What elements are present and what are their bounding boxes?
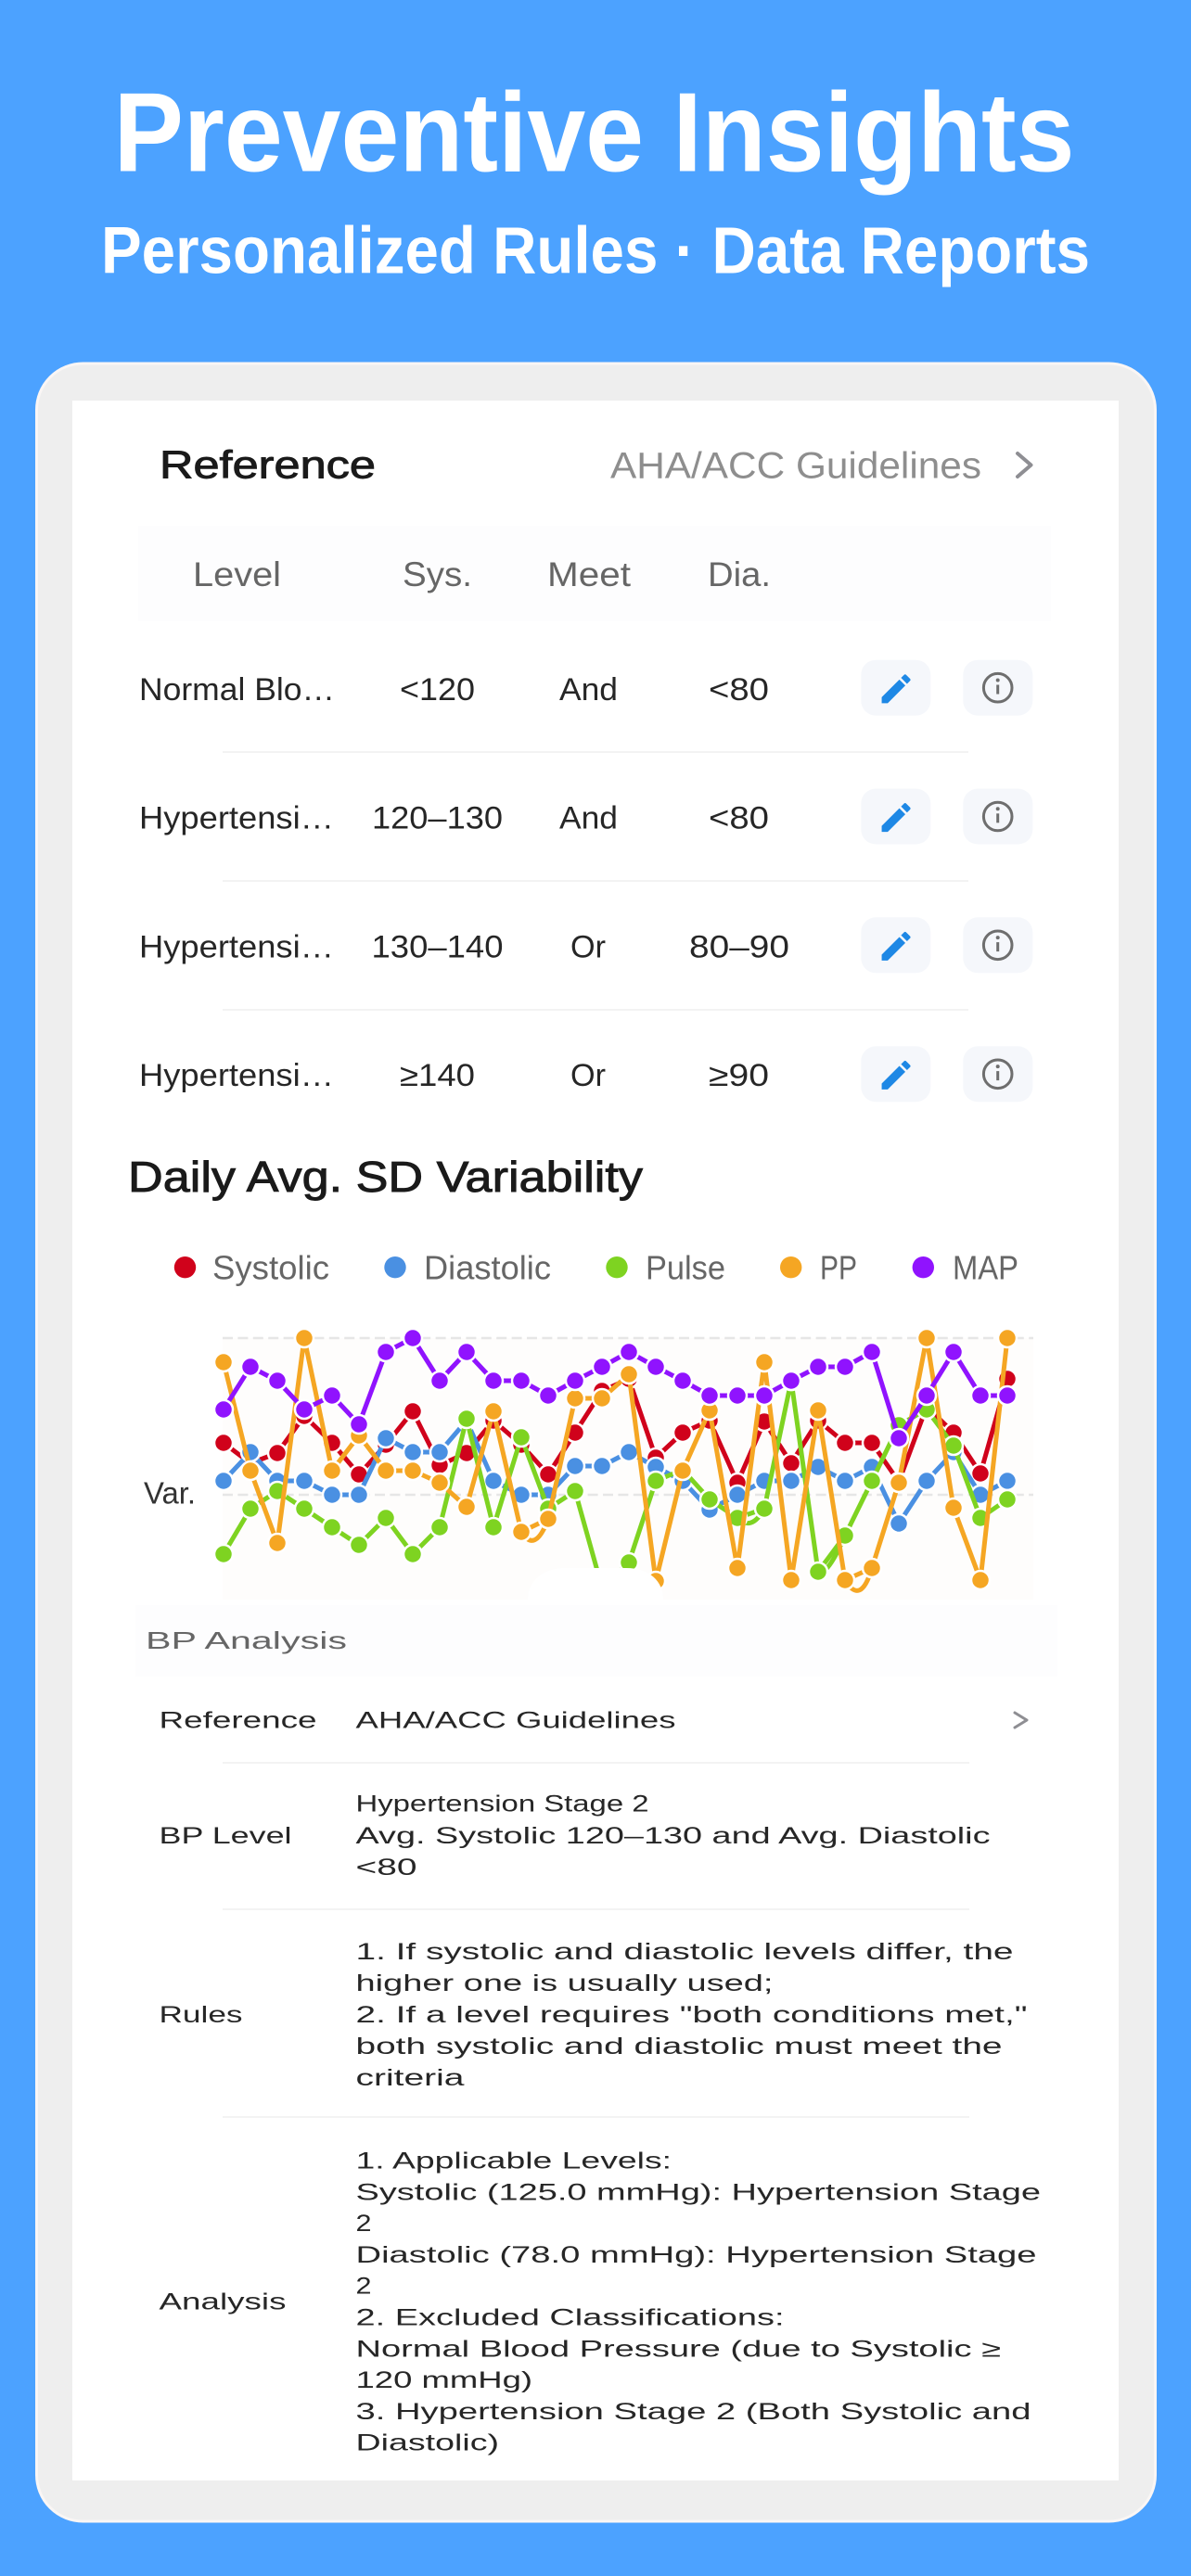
table row: Hypertension 120–130: And <box>559 801 618 836</box>
table row: Normal Blood Pressure: <80 <box>709 672 769 708</box>
panel: BP analysis <box>135 1605 1057 2456</box>
table row: Hypertension 120–130: <80 <box>709 801 769 836</box>
table row: Hypertension ≥140: ≥140 <box>400 1058 475 1093</box>
table row: Hypertension ≥140: Or <box>570 1058 606 1093</box>
table row: Normal Blood Pressure: Normal Blo… <box>139 672 335 708</box>
table row: Hypertension 120–130: Hypertensi… <box>139 801 334 836</box>
heading: Reference: Reference <box>160 443 376 486</box>
chart legend: MAP <box>953 1248 1018 1287</box>
scroll handle overlay <box>528 1568 663 1600</box>
table row: Normal Blood Pressure <box>139 660 1032 716</box>
row: Analysis: Systolic (125.0 mmHg): Hypertension Stage <box>356 2179 1041 2205</box>
row: Analysis: 2. Excluded Classifications: <box>356 2304 785 2330</box>
subtitle: Personalized Rules · Data Reports <box>101 215 1090 287</box>
row: BP Level <box>160 1792 991 1881</box>
row: BP Level: Hypertension Stage 2 <box>356 1792 649 1817</box>
table row: Hypertension 130–140 <box>139 917 1032 973</box>
panel: screen content <box>72 401 1119 2480</box>
table header <box>138 526 1051 621</box>
row: Analysis: Normal Blood Pressure (due to Systolic ≥ <box>356 2337 1001 2363</box>
row: Analysis <box>160 2148 1041 2456</box>
panel: reference table <box>138 443 1051 1102</box>
table header: Level <box>193 555 281 593</box>
chart legend: Pulse <box>646 1248 725 1287</box>
row: Reference: AHA/ACC Guidelines <box>356 1708 675 1734</box>
row: BP Level: BP Level <box>160 1823 291 1849</box>
series: Diastolic <box>224 1421 1007 1524</box>
table row: Hypertension 130–140: 80–90 <box>689 929 789 964</box>
row: Analysis: 120 mmHg) <box>356 2367 532 2393</box>
row: Analysis: 2 <box>356 2274 371 2300</box>
row: Reference <box>160 1708 1027 1734</box>
table row: Hypertension 120–130 <box>139 788 1032 844</box>
table header: Dia. <box>708 555 771 593</box>
row: Analysis: Diastolic) <box>356 2430 499 2456</box>
table header: Meet <box>547 555 632 593</box>
table row: Hypertension ≥140: ≥90 <box>709 1058 769 1093</box>
row: BP Level: Avg. Systolic 120–130 and Avg. Diastolic <box>356 1823 991 1849</box>
title: Preventive Insights <box>113 69 1074 195</box>
guideline selector: AHA/ACC Guidelines <box>610 445 981 486</box>
row: Rules: both systolic and diastolic must meet the <box>356 2034 1002 2060</box>
chart: daily variability line chart <box>144 1338 1033 1600</box>
table row: Hypertension ≥140 <box>139 1046 1032 1102</box>
series: MAP <box>224 1338 1007 1438</box>
row: Rules: 1. If systolic and diastolic levels differ, the <box>356 1939 1013 1965</box>
row: BP Level: <80 <box>356 1855 417 1881</box>
row: Rules: criteria <box>356 2065 465 2091</box>
chart legend <box>174 1248 1018 1287</box>
row: Analysis: 2 <box>356 2211 371 2237</box>
row: Analysis: Analysis <box>160 2289 286 2315</box>
chart legend: PP <box>820 1248 857 1287</box>
chart legend: Systolic <box>212 1248 329 1287</box>
y axis label: Var. <box>144 1476 196 1511</box>
row: Analysis: Diastolic (78.0 mmHg): Hypertension Stage <box>356 2242 1037 2268</box>
row: Rules: 2. If a level requires "both conditions met," <box>356 2002 1028 2028</box>
table row: Hypertension ≥140: Hypertensi… <box>139 1058 334 1093</box>
icon: chevron <box>1018 453 1031 477</box>
row: Rules: Rules <box>160 2002 243 2028</box>
table row: Hypertension 130–140: 130–140 <box>371 929 503 964</box>
table row: Hypertension 130–140: Or <box>570 929 606 964</box>
device frame <box>37 363 1156 2521</box>
row: Analysis: 3. Hypertension Stage 2 (Both Systolic and <box>356 2399 1031 2425</box>
section header: BP Analysis <box>146 1626 347 1654</box>
table row: Hypertension 120–130: 120–130 <box>372 801 503 836</box>
section header <box>135 1605 1057 1677</box>
series: PP <box>224 1338 1007 1590</box>
table row: Normal Blood Pressure: <120 <box>400 672 475 708</box>
chart legend: Diastolic <box>424 1248 551 1287</box>
heading: Daily Avg. SD Variability: Daily Avg. SD Variability <box>128 1153 643 1201</box>
table row: Hypertension 130–140: Hypertensi… <box>139 929 334 964</box>
row: Rules: higher one is usually used; <box>356 1970 774 1996</box>
table header: Sys. <box>403 555 472 593</box>
row: Rules <box>160 1939 1028 2091</box>
series: Pulse <box>224 1381 1007 1588</box>
row: Reference: Reference <box>160 1708 317 1734</box>
table row: Normal Blood Pressure: And <box>559 672 618 708</box>
row: Analysis: 1. Applicable Levels: <box>356 2148 672 2174</box>
series: Systolic <box>224 1379 1007 1483</box>
